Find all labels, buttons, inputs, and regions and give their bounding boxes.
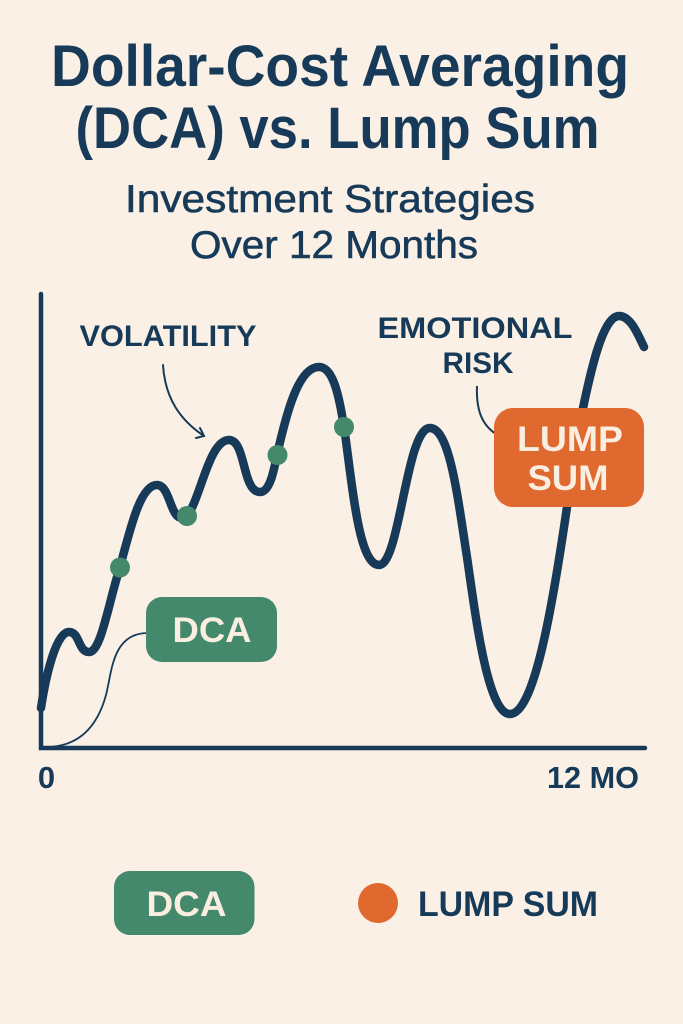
axis label: end: 12 MO [547,760,639,795]
subtitle: Investment Strategies [125,178,535,221]
axis label: start: 0 [38,760,55,795]
chart axes [41,294,645,748]
title: (DCA) vs. Lump Sum [76,96,600,161]
legend: DCA: DCA [146,885,226,924]
subtitle: Over 12 Months [190,224,478,267]
lump sum callout: LUMP [517,420,623,459]
title [51,34,629,161]
lump sum callout: SUM [528,459,608,498]
volatility label: VOLATILITY [80,320,256,353]
emotional risk label: RISK [442,347,514,380]
DCA purchase points [110,417,354,578]
lump sum callout [494,408,644,507]
DCA connector line [48,633,148,747]
volatility arrow [163,365,204,438]
legend: lump sum [358,883,598,924]
legend: lump sum: LUMP SUM [418,885,598,924]
legend: DCA [114,871,254,935]
emotional risk connector [477,386,496,434]
DCA callout: DCA [172,611,252,650]
emotional risk label: EMOTIONAL [378,312,572,345]
emotional risk label [378,312,572,380]
title: Dollar-Cost Averaging [51,34,629,99]
line chart curve [41,316,644,714]
DCA callout [146,597,277,662]
subtitle [125,178,535,267]
